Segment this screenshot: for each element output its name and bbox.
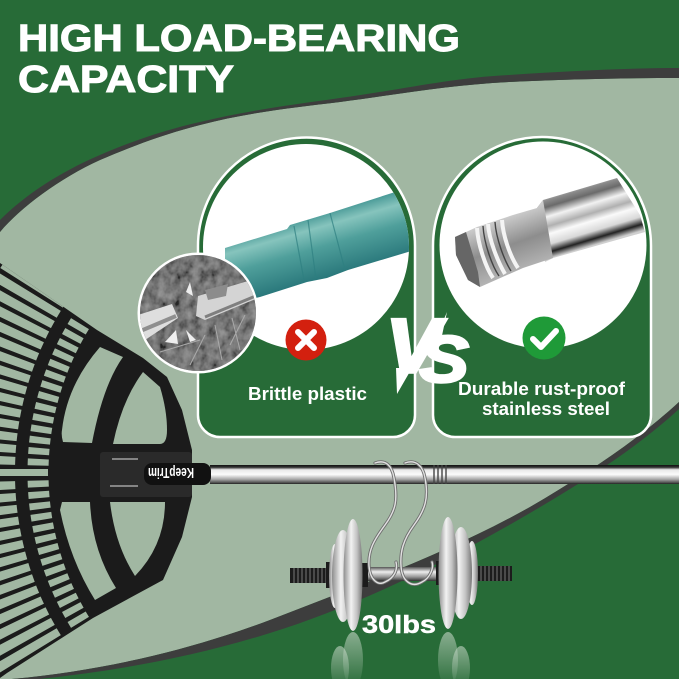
label: durable stainless steel: Durable rust-proof [458, 378, 626, 399]
weight label: 30lbs: 30lbs [362, 611, 436, 639]
rake socket [100, 452, 192, 497]
VS badge: S [419, 322, 469, 396]
hooks [369, 462, 433, 584]
grip with brand: KeepTrim [148, 464, 194, 481]
title: HIGH LOAD-BEARING [18, 18, 460, 60]
icon: red cross [286, 320, 326, 360]
rake head [0, 263, 192, 678]
title: CAPACITY [18, 59, 234, 101]
dumbbell reflection [331, 632, 470, 679]
rake windows [60, 347, 167, 600]
title [18, 18, 460, 101]
label: brittle plastic: Brittle plastic [248, 384, 367, 404]
icon: green check [522, 316, 566, 360]
label: durable stainless steel: stainless steel [482, 398, 610, 419]
teal plastic tube [225, 192, 409, 298]
steel tube [455, 178, 645, 287]
dumbbell [290, 517, 512, 631]
VS badge: V [386, 304, 446, 389]
label: durable stainless steel [458, 378, 626, 419]
photo: broken plastic tube on grass [138, 252, 258, 374]
grip with brand [144, 463, 211, 485]
panel: stainless steel [433, 137, 651, 437]
rake slots [0, 284, 80, 662]
panel: brittle plastic [198, 138, 420, 437]
VS badge [386, 304, 469, 396]
pole [144, 463, 679, 485]
